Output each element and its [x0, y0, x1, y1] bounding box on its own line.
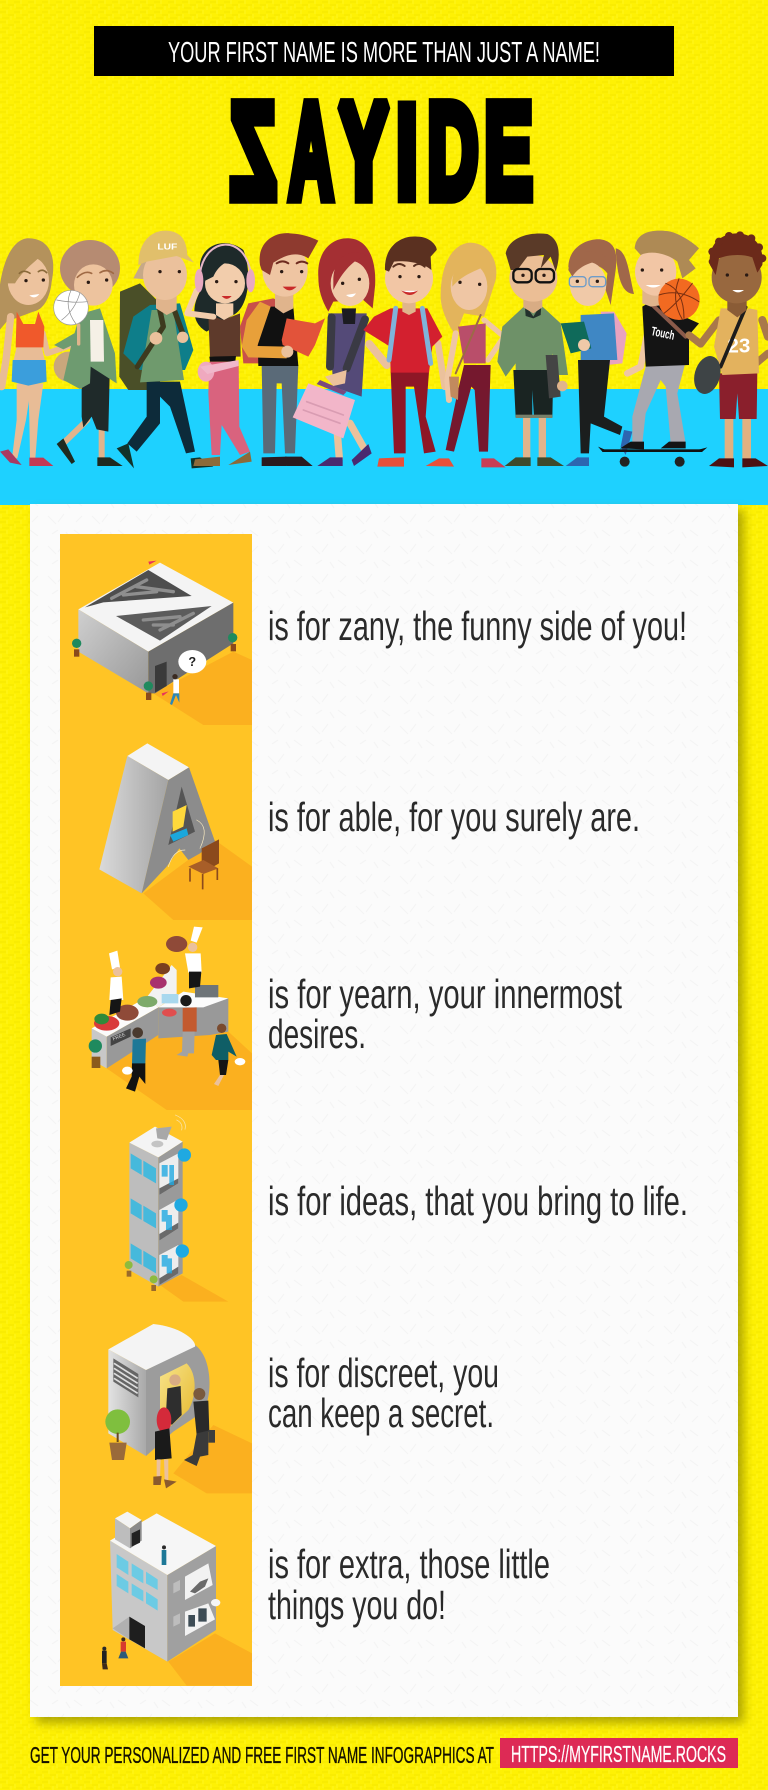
name title: A — [289, 77, 333, 227]
person: girl with ponytail and tablet — [561, 239, 634, 466]
illustration: letter I tower — [125, 1115, 228, 1302]
figure: person at maze — [170, 674, 179, 705]
name title: I — [396, 76, 418, 227]
figure: customer in blue — [122, 1027, 146, 1092]
icon: thought bubble — [178, 650, 206, 673]
group of twelve young people, left half — [0, 231, 375, 468]
figure: person on roof — [162, 1545, 166, 1565]
text: D lines: can keep a secret. — [268, 1390, 494, 1436]
figure: man in doorway — [166, 1374, 182, 1425]
illustration: letter D building — [105, 1324, 252, 1493]
text: Y lines: desires. — [268, 1011, 366, 1057]
figures: people at the entrance — [102, 1637, 128, 1669]
text: D lines — [268, 1350, 499, 1436]
entrance door — [129, 1617, 145, 1648]
icon: potted tree — [105, 1409, 130, 1460]
chat bubbles — [174, 1148, 191, 1258]
name title: E — [484, 76, 533, 226]
balconies — [173, 1563, 220, 1636]
person: skater with basketball: Touch — [650, 324, 676, 343]
person: girl in green jacket with volleyball — [54, 240, 123, 466]
sign: free — [111, 1028, 131, 1046]
icon: wooden chair — [188, 839, 219, 889]
text: D lines: is for discreet, you — [268, 1350, 499, 1396]
person: girl in orange top — [0, 238, 78, 466]
figure: man with briefcase — [184, 1388, 215, 1466]
windows, floor 2 — [131, 1198, 156, 1228]
windows, floor 3 — [131, 1243, 156, 1273]
person: boy in yellow tank top — [689, 231, 768, 467]
illustration: letter A building — [99, 743, 252, 920]
name title: D — [428, 75, 478, 226]
person: blonde girl in pink top — [441, 243, 506, 467]
blue floor band — [0, 389, 768, 505]
panel shadow — [36, 510, 744, 1723]
figure: chef right — [185, 927, 203, 988]
person: backpacker in cap — [117, 231, 213, 468]
person: girl with pink case — [293, 238, 375, 466]
satellite dish — [151, 1115, 185, 1147]
windows — [117, 1554, 158, 1611]
balconies — [159, 1153, 178, 1285]
person: boy in red shirt — [363, 237, 454, 467]
figure: woman in red — [153, 1407, 177, 1488]
text: E lines — [268, 1541, 550, 1628]
food on the counter — [94, 936, 218, 1031]
person: boy with glasses in green sweater — [497, 233, 568, 466]
figure: chef left — [109, 951, 123, 1015]
plants — [125, 1261, 158, 1291]
person: red-haired boy with book — [240, 233, 325, 466]
illustration: letter Z maze building — [72, 561, 252, 725]
white content panel — [30, 504, 738, 1717]
sign: free: FREE — [112, 1032, 127, 1043]
illustration: letter Y buffet counter — [89, 927, 252, 1110]
text: Y lines — [268, 971, 622, 1057]
windows, floor 1 — [131, 1153, 156, 1183]
figure: woman in teal — [212, 1024, 245, 1086]
person: girl with headphones — [187, 243, 255, 466]
group of twelve young people, right half — [363, 231, 768, 467]
illustration: letter E building — [102, 1512, 252, 1686]
person: skater with basketball — [598, 231, 707, 467]
icon: thought bubble: ? — [188, 655, 196, 669]
plant — [89, 1039, 102, 1068]
text: E lines: is for extra, those little — [268, 1541, 550, 1587]
text: E lines: things you do! — [268, 1582, 446, 1628]
text: Y lines: is for yearn, your innermost — [268, 971, 622, 1017]
figure: customer in orange — [162, 995, 197, 1057]
orange illustration strip — [60, 534, 252, 1686]
icon: basketball — [658, 279, 700, 320]
person: backpacker in cap: LUF — [157, 241, 177, 251]
name title — [231, 75, 533, 227]
name title: Z — [231, 76, 276, 225]
header banner — [94, 26, 674, 76]
person: boy in yellow tank top: 23 — [727, 335, 750, 358]
name title: Y — [339, 76, 388, 225]
